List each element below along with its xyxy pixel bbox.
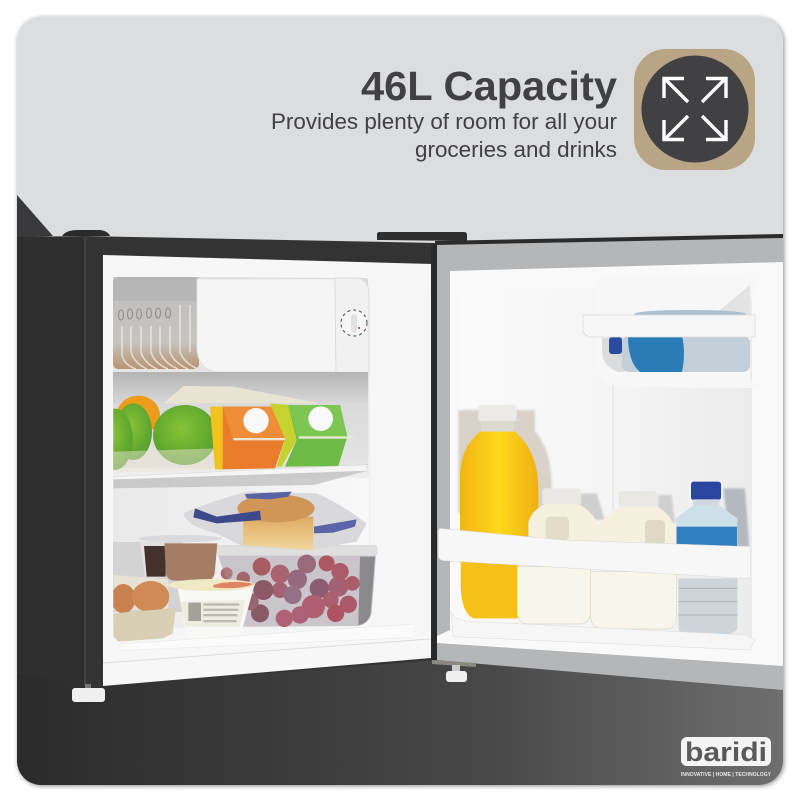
logo tagline: INNOVATIVE | HOME | TECHNOLOGY (681, 772, 772, 778)
heading: 46L Capacity (361, 63, 617, 109)
thermostat dial (341, 310, 367, 336)
grape tub (215, 545, 377, 627)
bin shell (595, 273, 763, 388)
bottom hinge and foot (432, 660, 476, 682)
door shelf rail (438, 528, 751, 578)
bin inner shade (602, 338, 625, 372)
apple right (153, 405, 217, 465)
juice bottle (460, 405, 538, 618)
fridge scene (17, 195, 783, 786)
carton tops (163, 386, 320, 403)
orange fruit (118, 396, 160, 430)
door top edge (435, 234, 783, 245)
freezer unit (113, 277, 369, 376)
door inner panel (460, 285, 752, 640)
blue ribbon left (193, 508, 261, 523)
freezer control panel (335, 278, 369, 376)
pudding cups (138, 535, 222, 581)
icon tile (634, 49, 755, 170)
description line two: groceries and drinks (415, 137, 617, 162)
door gasket (437, 262, 783, 666)
floor (17, 660, 783, 785)
logo plate (681, 737, 771, 766)
ribbon top (245, 492, 292, 499)
top hinge left (62, 230, 110, 236)
green carton (270, 403, 353, 467)
freezer door (197, 279, 336, 372)
crisper tray (113, 448, 217, 473)
door edge (431, 245, 437, 660)
logo (681, 737, 772, 778)
milk jug two (591, 491, 677, 629)
upper door bin (595, 273, 763, 388)
cabinet side panel (17, 236, 85, 640)
yoghurt pot (168, 579, 255, 638)
water bottle (676, 482, 737, 637)
inner right wall (368, 278, 416, 470)
shelf shadow (113, 471, 367, 488)
lower left wall shade (113, 542, 183, 612)
cabinet edge highlight (84, 237, 86, 686)
panel seam (612, 290, 614, 510)
fridge foot left (72, 684, 105, 702)
icon: expand capacity (634, 49, 755, 170)
glass shelf (113, 465, 367, 480)
orange carton (210, 407, 291, 469)
fruit and cartons (97, 386, 367, 488)
muffin bag (183, 492, 367, 551)
bottle lying on upper shelf (609, 310, 750, 372)
cabinet white liner (103, 255, 432, 686)
lower liner groove (103, 639, 430, 663)
blue ribbon right (314, 519, 357, 533)
door bin floor (451, 612, 755, 650)
bottom shelf lip (120, 623, 430, 651)
wall corner (17, 195, 53, 238)
lower back wall (113, 478, 369, 628)
muffin base (243, 517, 313, 550)
door (431, 234, 783, 690)
cabinet front frame (85, 236, 436, 686)
freezer fins (113, 277, 199, 369)
back wall (113, 372, 368, 468)
bin shade (715, 285, 750, 315)
apple left (113, 408, 132, 470)
logo wordmark: baridi (685, 737, 767, 767)
lower compartment (111, 492, 430, 651)
door bottles (438, 405, 755, 650)
door silver frame (435, 236, 783, 690)
milk jug one (517, 488, 598, 624)
bottle shadows (458, 410, 749, 547)
upper door rail (583, 315, 755, 337)
description line one: Provides plenty of room for all your (271, 109, 617, 134)
icon arrows (664, 78, 726, 140)
top hinge right (377, 232, 467, 241)
icon circle (642, 56, 748, 162)
apple middle (121, 403, 152, 460)
egg carton (111, 575, 176, 642)
upper compartment (97, 372, 368, 488)
muffin top (237, 494, 315, 522)
cabinet inner cavity (113, 277, 370, 480)
